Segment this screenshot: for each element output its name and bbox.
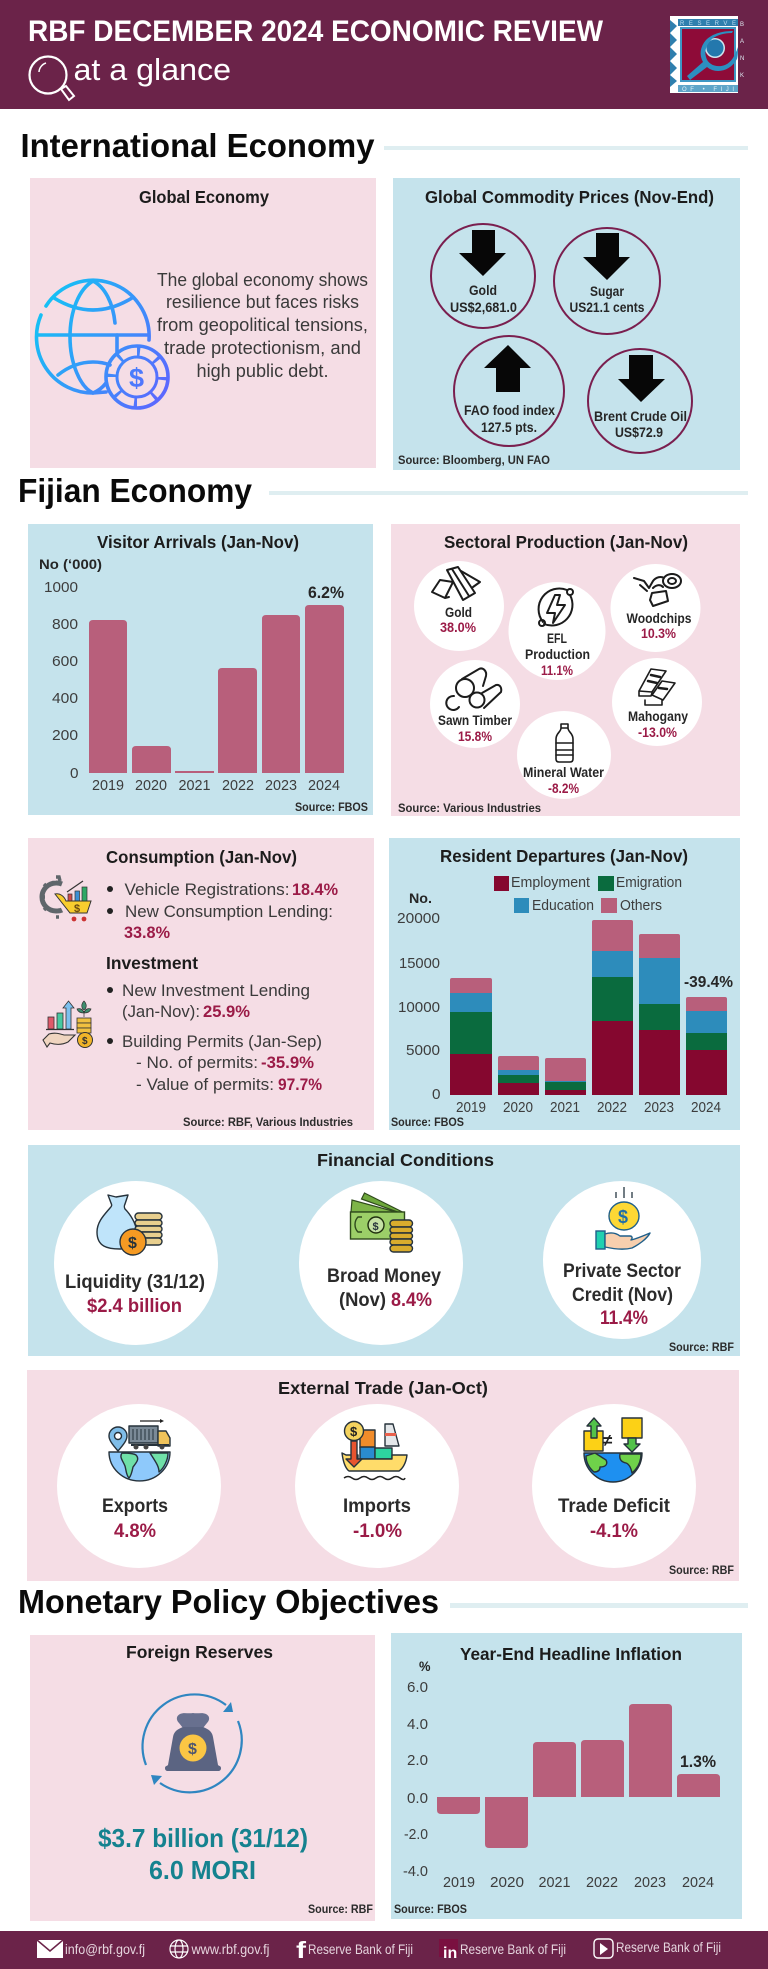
icon: money bag with circular arrows (143, 1694, 242, 1792)
footer bar (0, 1931, 768, 1969)
icon: container ship (342, 1422, 407, 1480)
item: broad money: Broad Money (327, 1266, 441, 1287)
source: Source: RBF (669, 1565, 734, 1577)
item: sawn timber: Sawn Timber (438, 713, 513, 728)
icon: globe with dollar coin (36, 280, 168, 408)
subtitle: at a glance (74, 52, 231, 87)
stacked bar chart: resident departures: 15000 (399, 955, 440, 972)
legend (494, 874, 682, 914)
bar chart: inflation (403, 1679, 720, 1891)
bar chart: visitor arrivals: 400 (52, 690, 78, 707)
bar chart: visitor arrivals: 600 (52, 653, 78, 670)
bar chart: inflation: 4.0 (407, 1716, 428, 1733)
panel: Consumption and Investment (28, 838, 374, 1130)
item: broad money (299, 1181, 463, 1345)
contact: linkedin: Reserve Bank of Fiji (460, 1941, 566, 1957)
legend: Others (620, 897, 662, 914)
item: mineral water: -8.2% (548, 781, 579, 796)
bar chart: inflation: 1.3% (680, 1753, 716, 1771)
bar chart: visitor arrivals: 2022 (222, 777, 254, 794)
stacked bar chart: resident departures: 2024 (691, 1099, 721, 1116)
item: EFL production (508, 582, 606, 680)
item: liquidity (54, 1181, 218, 1345)
contact: youtube: Reserve Bank of Fiji (616, 1939, 721, 1955)
logo: Reserve Bank of Fiji: K (740, 73, 744, 79)
stacked bar chart: resident departures: 2021 (550, 1099, 580, 1116)
bar chart: visitor arrivals: 2019 (92, 777, 124, 794)
stacked bar chart: resident departures: 2022 (597, 1099, 627, 1116)
commodity: gold: Gold (469, 283, 497, 298)
icon: container ship: $ (350, 1424, 358, 1439)
commodity: gold: US$2,681.0 (450, 300, 517, 315)
item: gold: 38.0% (440, 620, 476, 635)
bullets: investment: Building Permits (Jan-Sep) (122, 1032, 322, 1051)
reserves value: $3.7 billion (31/12) (98, 1823, 308, 1853)
item: woodchips: Woodchips (626, 611, 692, 626)
commodity: FAO food index: 127.5 pts. (481, 420, 537, 435)
contact: website (170, 1940, 270, 1958)
bar chart: inflation: -2.0 (404, 1826, 428, 1843)
panel title: Global Economy (139, 187, 269, 207)
item: imports: Imports (343, 1496, 411, 1517)
contact: facebook: f (296, 1937, 306, 1963)
bar chart: visitor arrivals: 2023 (265, 777, 297, 794)
axis unit: % (419, 1658, 431, 1674)
bullets: investment: 25.9% (203, 1002, 250, 1021)
body text: resilience but faces risks (166, 291, 359, 312)
item: EFL production: EFL (547, 631, 567, 646)
item: liquidity: $2.4 billion (87, 1296, 182, 1317)
item: imports (295, 1404, 459, 1568)
item: trade deficit: -4.1% (590, 1521, 638, 1542)
bar chart: visitor arrivals: 2021 (178, 777, 210, 794)
panel: Global Economy (30, 178, 376, 468)
stacked bar chart: resident departures: 5000 (406, 1042, 440, 1059)
icon: banknotes and coins: $ (372, 1221, 379, 1233)
item: private sector credit: Credit (Nov) (572, 1285, 673, 1306)
panel title: Year-End Headline Inflation (460, 1644, 682, 1664)
body text (157, 269, 368, 381)
bar chart: inflation: 2019 (443, 1874, 475, 1891)
source: Source: FBOS (394, 1904, 467, 1916)
item: woodchips: 10.3% (641, 626, 676, 641)
panel title: Visitor Arrivals (Jan-Nov) (97, 532, 299, 552)
bar chart: inflation: 0.0 (407, 1790, 428, 1807)
bullets: investment: 97.7% (278, 1075, 322, 1094)
stacked bar chart: resident departures: 0 (432, 1086, 440, 1103)
stacked bar chart: resident departures: 2020 (503, 1099, 533, 1116)
logo: Reserve Bank of Fiji: N (740, 56, 744, 62)
heading: Monetary Policy Objectives (18, 1583, 748, 1620)
bar chart: inflation: 2021 (538, 1874, 570, 1891)
source: Source: Bloomberg, UN FAO (398, 455, 550, 467)
panel: External Trade (27, 1370, 739, 1581)
item: private sector credit: 11.4% (600, 1308, 648, 1329)
icon: consumption gear and cart: $ (74, 903, 80, 915)
body text: trade protectionism, and (164, 337, 361, 358)
bullets: investment: - No. of permits: (136, 1053, 258, 1072)
stacked bar chart: resident departures: 20000 (397, 910, 440, 927)
bar chart: visitor arrivals: 2020 (135, 777, 167, 794)
bar chart: inflation: 2023 (634, 1874, 666, 1891)
logo: Reserve Bank of Fiji: RESERVE (680, 21, 736, 27)
bullets: investment: New Investment Lending (122, 981, 310, 1000)
panel: Global Commodity Prices (393, 178, 740, 470)
logo: Reserve Bank of Fiji (670, 16, 747, 93)
item: mahogany: -13.0% (638, 725, 677, 740)
heading: Fijian Economy (18, 472, 748, 509)
commodity: FAO food index: FAO food index (464, 403, 555, 418)
panel title: External Trade (Jan-Oct) (278, 1378, 488, 1398)
item: EFL production: Production (525, 647, 590, 662)
panel title: Sectoral Production (Jan-Nov) (444, 532, 688, 552)
bullets: consumption: New Consumption Lending: (125, 902, 333, 921)
bar chart: visitor arrivals: 6.2% (308, 584, 344, 602)
bar chart: inflation: 2024 (682, 1874, 714, 1891)
bar chart: inflation: -4.0 (403, 1863, 428, 1880)
item: exports (57, 1404, 221, 1568)
commodity: sugar: Sugar (590, 284, 625, 299)
item: broad money: 8.4% (391, 1290, 432, 1311)
icon: money bag with circular arrows: $ (188, 1741, 197, 1758)
legend: Education (532, 897, 594, 914)
item: mahogany (612, 658, 702, 746)
item: trade deficit (532, 1404, 696, 1568)
item: trade deficit: Trade Deficit (558, 1496, 671, 1517)
stacked bar chart: resident departures: 2019 (456, 1099, 486, 1116)
source: Source: FBOS (391, 1117, 464, 1129)
icon: investment chart and hand: $ (82, 1036, 88, 1047)
item: private sector credit: Private Sector (563, 1261, 682, 1282)
heading: International Economy: International Economy (20, 127, 375, 164)
heading: Monetary Policy Objectives: Monetary Policy Objectives (18, 1583, 439, 1620)
item: woodchips (610, 564, 700, 652)
contact: youtube (594, 1939, 721, 1958)
axis unit: No (‘000) (39, 556, 102, 572)
panel title: Foreign Reserves (126, 1642, 273, 1662)
bar chart: visitor arrivals: 200 (52, 727, 78, 744)
icon: money bag and coins (97, 1195, 162, 1255)
logo: Reserve Bank of Fiji: OF • FIJI (682, 87, 734, 93)
logo: Reserve Bank of Fiji: A (740, 39, 744, 45)
item: exports: 4.8% (114, 1521, 156, 1542)
legend: Emigration (616, 874, 682, 891)
item: exports: Exports (102, 1496, 168, 1517)
item: gold (414, 561, 504, 651)
item: gold: Gold (445, 605, 472, 620)
item: private sector credit (543, 1181, 701, 1339)
contact: website: www.rbf.gov.fj (191, 1941, 270, 1957)
contact: linkedin (439, 1939, 566, 1962)
header banner (0, 0, 768, 109)
panel title: Financial Conditions (317, 1150, 494, 1170)
bullets: consumption: Vehicle Registrations: (124, 880, 290, 899)
item: sawn timber (430, 660, 520, 748)
contact: facebook: Reserve Bank of Fiji (308, 1941, 413, 1957)
panel: Financial Conditions (28, 1145, 740, 1356)
bar chart: inflation: 2020 (490, 1874, 524, 1891)
bar chart: visitor arrivals: 1000 (44, 579, 78, 596)
icon: unequal trade on globe (584, 1418, 642, 1482)
body text: from geopolitical tensions, (157, 314, 368, 335)
heading: Fijian Economy: Fijian Economy (18, 472, 253, 509)
stacked bar chart: resident departures: 10000 (398, 999, 440, 1016)
panel: Visitor Arrivals (28, 524, 373, 815)
item: sawn timber: 15.8% (458, 729, 492, 744)
icon: truck on globe (109, 1419, 170, 1481)
source: Source: Various Industries (398, 803, 541, 815)
icon: magnifying glass (30, 56, 74, 100)
commodity: gold (431, 224, 535, 328)
body text: The global economy shows (157, 269, 368, 290)
panel: Year-End Headline Inflation (391, 1633, 742, 1919)
panel: Resident Departures (389, 838, 740, 1130)
icon: coin over hand: $ (618, 1207, 628, 1227)
commodity: sugar (554, 228, 660, 334)
icon: investment chart and hand (43, 1001, 92, 1048)
icon: consumption gear and cart (41, 877, 91, 921)
legend: Employment (511, 874, 591, 891)
bullets: investment (107, 981, 322, 1094)
investment heading: Investment (106, 953, 198, 973)
panel: Sectoral Production (391, 524, 740, 816)
logo: Reserve Bank of Fiji: B (740, 22, 744, 28)
source: Source: RBF (669, 1342, 734, 1354)
item: mineral water: Mineral Water (523, 765, 605, 780)
title: RBF DECEMBER 2024 ECONOMIC REVIEW (28, 15, 604, 48)
commodity: FAO food index (454, 336, 564, 446)
source: Source: RBF (308, 1904, 373, 1916)
bullets: consumption: 33.8% (124, 923, 170, 942)
bullets: consumption: 18.4% (292, 880, 338, 899)
contact: linkedin: in (443, 1945, 457, 1962)
bar chart: visitor arrivals (44, 579, 344, 794)
bullets: investment: - Value of permits: (136, 1075, 274, 1094)
source: Source: RBF, Various Industries (183, 1117, 353, 1129)
consumption heading: Consumption (Jan-Nov) (106, 847, 297, 867)
source: Source: FBOS (295, 802, 368, 814)
contact: email: info@rbf.gov.fj (65, 1941, 145, 1957)
bar chart: inflation: 2.0 (407, 1752, 428, 1769)
icon: banknotes and coins (350, 1193, 412, 1252)
contact: email (37, 1940, 145, 1958)
item: mahogany: Mahogany (628, 709, 688, 724)
icon: unequal trade on globe: ≠ (603, 1431, 613, 1450)
bar chart: visitor arrivals: 0 (70, 765, 78, 782)
icon: money bag and coins: $ (128, 1235, 137, 1252)
stacked bar chart: resident departures (397, 910, 733, 1116)
heading: International Economy (20, 127, 748, 164)
bullets: investment: (Jan-Nov): (122, 1002, 200, 1021)
commodity: Brent crude oil: Brent Crude Oil (594, 409, 687, 424)
commodity: Brent crude oil: US$72.9 (615, 425, 663, 440)
contact: facebook (296, 1937, 413, 1963)
icon: coin over hand (596, 1187, 650, 1249)
bar chart: inflation: 2022 (586, 1874, 618, 1891)
stacked bar chart: resident departures: 2023 (644, 1099, 674, 1116)
body text: high public debt. (196, 360, 328, 381)
icon: globe with dollar coin: $ (129, 363, 144, 393)
item: broad money: (Nov) (339, 1290, 386, 1311)
panel title: Global Commodity Prices (Nov-End) (425, 187, 714, 207)
item: liquidity: Liquidity (31/12) (65, 1272, 205, 1293)
panel title: Resident Departures (Jan-Nov) (440, 846, 688, 866)
reserves value (98, 1823, 308, 1885)
panel: Foreign Reserves (30, 1635, 375, 1921)
reserves value: 6.0 MORI (149, 1855, 256, 1885)
bar chart: inflation: 6.0 (407, 1679, 428, 1696)
axis unit: No. (409, 890, 432, 906)
bullets: investment: -35.9% (261, 1053, 314, 1072)
bullets: consumption (107, 880, 338, 942)
item: imports: -1.0% (353, 1521, 402, 1542)
bar chart: visitor arrivals: 800 (52, 616, 78, 633)
stacked bar chart: resident departures: -39.4% (684, 974, 733, 991)
item: EFL production: 11.1% (541, 663, 573, 678)
commodity: sugar: US21.1 cents (570, 300, 644, 315)
item: mineral water (517, 711, 611, 799)
commodity: Brent crude oil (588, 349, 692, 453)
bar chart: visitor arrivals: 2024 (308, 777, 340, 794)
